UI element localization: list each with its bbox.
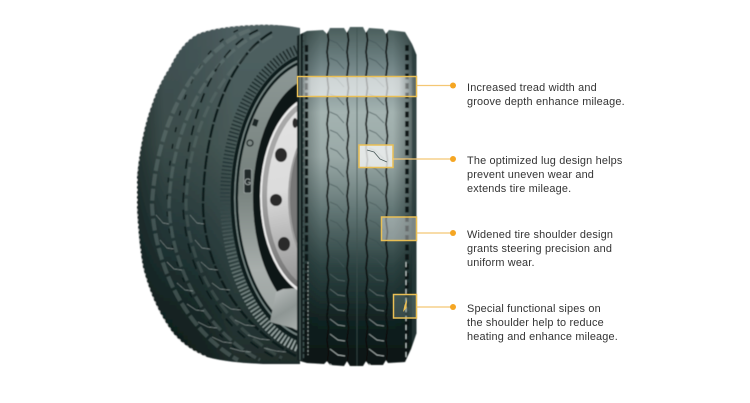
side view of tire <box>130 20 305 370</box>
text: tread width: groove depth enhance mileage. <box>467 96 625 108</box>
text: shoulder design: uniform wear. <box>467 257 535 269</box>
sidewall marking G: G <box>244 177 251 187</box>
text: lug design <box>467 155 623 195</box>
wheel and sidewall, cropped by the front view <box>220 45 298 352</box>
callout 4: sipes box <box>394 294 456 318</box>
sidewall marking G <box>244 169 252 193</box>
sidewall band <box>230 56 298 340</box>
steel wheel <box>259 101 298 290</box>
lug sipes <box>330 40 384 386</box>
side tread grooves <box>167 30 296 362</box>
side tread sipes <box>156 215 286 352</box>
front view of tire <box>295 25 420 386</box>
shoulder grooves <box>306 45 407 362</box>
text: lug design: The optimized lug design helps <box>467 155 623 167</box>
center line <box>356 28 358 366</box>
side tread rib strips <box>152 30 282 360</box>
text: tread width: Increased tread width and <box>467 82 597 94</box>
callout 3: shoulder box <box>382 217 456 240</box>
text: tread width <box>467 82 625 108</box>
sidewall lower lobe <box>270 288 300 330</box>
tread grooves <box>327 28 388 364</box>
bolt holes <box>270 118 298 251</box>
rim dark ring <box>252 83 298 292</box>
left sidewall strip <box>297 25 304 370</box>
text: shoulder design <box>467 229 613 269</box>
text: lug design: prevent uneven wear and <box>467 169 594 181</box>
callout 1: tread width box <box>298 76 456 96</box>
serrated sidewall shoulder <box>220 45 298 352</box>
tire illustration <box>130 20 420 386</box>
outer shoulder edge notches <box>136 24 280 358</box>
text: shoulder design: grants steering precision and <box>467 243 612 255</box>
text: functional sipes <box>467 303 618 343</box>
text: shoulder design: Widened tire shoulder design <box>467 229 613 241</box>
sidewall small emblems <box>247 119 259 146</box>
text: lug design: extends tire mileage. <box>467 183 571 195</box>
text: functional sipes: heating and enhance mileage. <box>467 331 618 343</box>
text: functional sipes: Special functional sipes on <box>467 303 601 315</box>
right edge strip <box>412 45 417 345</box>
text: functional sipes: the shoulder help to reduce <box>467 317 604 329</box>
callout 2: lug design box <box>359 145 456 168</box>
